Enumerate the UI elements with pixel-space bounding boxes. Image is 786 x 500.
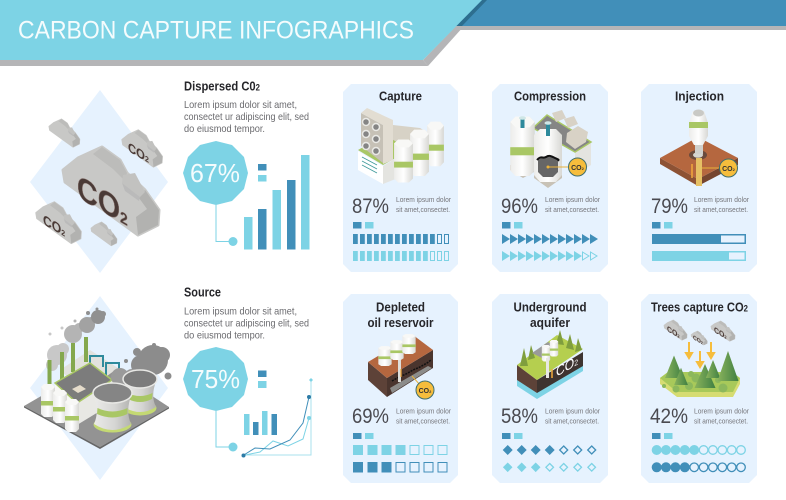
- heading: Trees capture CO2: [651, 300, 748, 314]
- percentage: 69%: [352, 405, 389, 428]
- percentage badge 75%: [183, 347, 248, 452]
- description: Lorem ipsum dolor: [545, 406, 601, 416]
- description: sit amet,consectet.: [694, 205, 748, 214]
- percentage badge 75%: 75%: [191, 364, 240, 394]
- bar chart: [244, 155, 310, 250]
- background diamond: [30, 296, 168, 480]
- description: sit amet,consectet.: [396, 205, 450, 214]
- description: Lorem ipsum dolor: [694, 195, 750, 204]
- description: sit amet,consectet.: [545, 205, 599, 214]
- legend: [652, 433, 672, 439]
- icon: injection well: CO2: [722, 166, 736, 173]
- description: Lorem ipsum dolor: [694, 406, 750, 416]
- panel: trees capture CO2: [641, 294, 757, 483]
- background diamond: [30, 90, 168, 273]
- legend: [502, 433, 522, 439]
- progress row: dark arrows: [502, 234, 598, 244]
- icon: trees and clouds: CO2: [667, 324, 680, 340]
- text block: Lorem ipsum dolor sit amet,: [184, 306, 297, 318]
- description: [396, 195, 452, 214]
- heading: Depleted: [376, 300, 425, 314]
- text block: consectet ur adipiscing elit, sed: [184, 318, 309, 330]
- percentage: 96%: [501, 195, 538, 218]
- panel: capture: [343, 84, 458, 272]
- legend: [353, 433, 374, 439]
- panel: depleted oil reservoir: [343, 294, 458, 483]
- panel: injection: [641, 84, 757, 272]
- panel: underground aquifer: [492, 294, 608, 483]
- progress row: light diamonds: [503, 462, 596, 472]
- panel: dispersed CO2: [30, 78, 310, 273]
- percentage badge 67%: 67%: [190, 158, 240, 188]
- heading: Underground: [514, 300, 587, 314]
- panel: source: [24, 284, 313, 480]
- percentage: 87%: [352, 195, 389, 218]
- icon: power plant: [24, 308, 172, 449]
- icon: oil reservoir: CO2: [419, 388, 432, 395]
- description: Lorem ipsum dolor: [396, 406, 452, 416]
- line chart: [242, 378, 313, 458]
- icon: trees and clouds: CO2: [714, 325, 727, 341]
- icon: CO2 clouds: CO2: [77, 168, 128, 234]
- text block: [184, 306, 309, 342]
- heading: oil reservoir: [368, 315, 434, 330]
- description: sit amet,consectet.: [545, 416, 599, 426]
- percentage badge 67%: [183, 141, 248, 246]
- percentage: 58%: [501, 405, 538, 428]
- heading: [368, 300, 434, 330]
- progress row: dark circles: [652, 462, 745, 472]
- icon: oil reservoir: [368, 334, 434, 399]
- heading: [514, 300, 587, 330]
- description: [694, 195, 750, 214]
- description: [396, 406, 452, 426]
- text block: [184, 99, 309, 135]
- panel: compression: [492, 84, 608, 272]
- icon: aquifer: CO2: [556, 351, 579, 380]
- icon: trees and clouds: [660, 320, 740, 397]
- title: CARBON CAPTURE INFOGRAPHICS: [18, 16, 414, 44]
- legend: [502, 222, 522, 228]
- description: [694, 406, 750, 426]
- heading: Source: [184, 284, 221, 300]
- header banner: [0, 0, 786, 66]
- progress row: light bars: [353, 251, 448, 261]
- heading: Dispersed C02: [184, 78, 260, 94]
- heading: aquifer: [530, 315, 570, 330]
- heading: Capture: [379, 88, 422, 104]
- description: Lorem ipsum dolor: [545, 195, 601, 204]
- progress row: dark bars: [353, 234, 448, 244]
- cooling towers: [93, 370, 157, 432]
- icon: CO2 clouds: CO2: [128, 139, 149, 166]
- text block: do eiusmod tempor.: [184, 330, 265, 342]
- progress row: light squares: [353, 445, 447, 455]
- description: sit amet,consectet.: [396, 416, 450, 426]
- icon: aquifer: [517, 330, 583, 399]
- description: sit amet,consectet.: [694, 416, 748, 426]
- icon: capture plant: [358, 108, 444, 184]
- text block: Lorem ipsum dolor sit amet,: [184, 99, 297, 111]
- icon: compressor: CO2: [571, 165, 585, 172]
- description: [545, 406, 601, 426]
- progress row: light circles: [652, 445, 745, 455]
- icon: CO2 clouds: [36, 119, 162, 246]
- icon: trees and clouds: CO2: [693, 335, 703, 347]
- legend: [652, 222, 672, 228]
- icon: compressor: [510, 110, 591, 188]
- progress bar: dark: [652, 234, 746, 244]
- icon: injection well: [660, 110, 738, 186]
- text block: do eiusmod tempor.: [184, 123, 265, 135]
- progress row: dark squares: [353, 462, 447, 472]
- percentage: 79%: [651, 195, 688, 218]
- bar chart: [244, 370, 277, 435]
- progress row: dark diamonds: [503, 445, 596, 455]
- heading: Injection: [675, 88, 724, 104]
- progress bar: light: [652, 251, 746, 261]
- icon: CO2 clouds: CO2: [43, 211, 66, 240]
- percentage: 42%: [650, 405, 688, 428]
- description: [545, 195, 601, 214]
- progress row: light arrows: [502, 251, 597, 261]
- legend: [353, 222, 374, 228]
- description: Lorem ipsum dolor: [396, 195, 452, 204]
- text block: consectet ur adipiscing elit, sed: [184, 111, 309, 123]
- heading: Compression: [514, 88, 586, 104]
